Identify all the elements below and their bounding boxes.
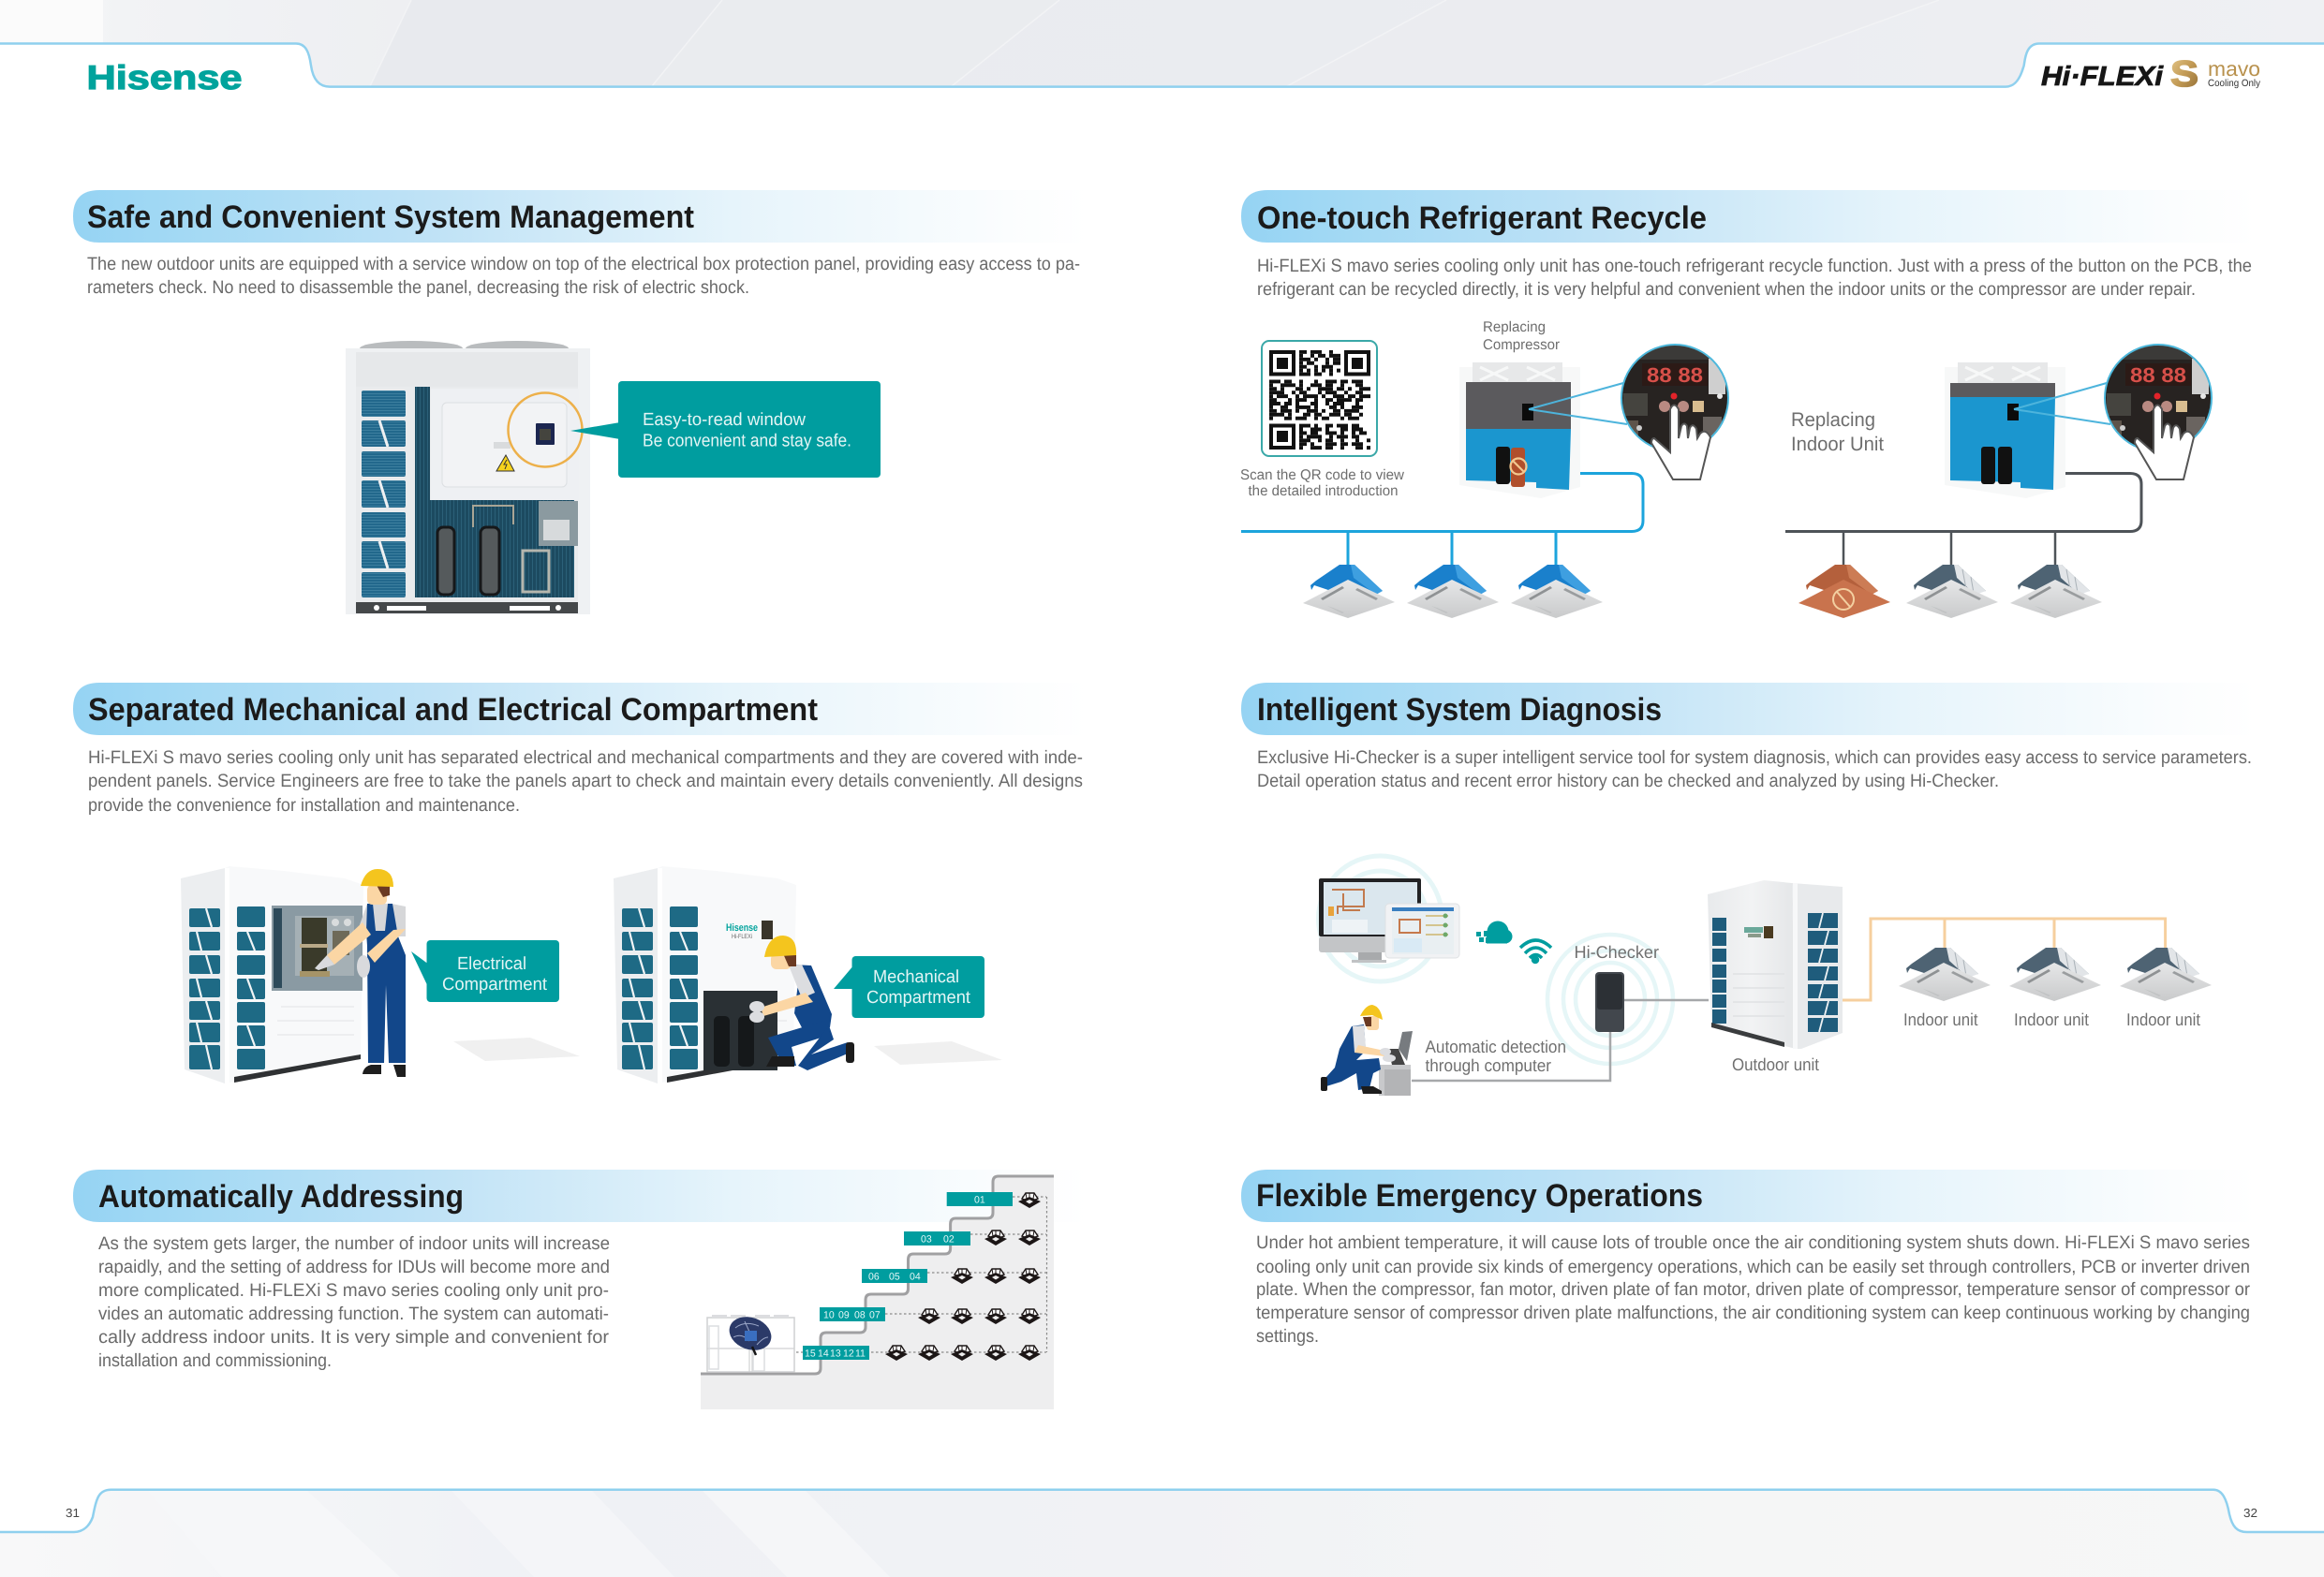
address box 06 05 04: 04 [910, 1272, 921, 1283]
address box 10 09 08 07: 08 [854, 1309, 866, 1320]
body text: provide the convenience for installation and maintenance. [88, 795, 520, 816]
body text: rameters check. No need to disassemble the panel, decreasing the risk of electric shock. [87, 277, 749, 298]
QR caption: the detailed introduction [1248, 483, 1398, 499]
body text: As the system gets larger, the number of indoor units will increase [98, 1233, 610, 1254]
worker at computer [1321, 1005, 1413, 1096]
label: automatic detection: through computer [1426, 1055, 1551, 1075]
address box 01 [947, 1192, 1013, 1206]
icon: wifi [1520, 940, 1551, 963]
panel: one-touch refrigerant recycle [1240, 190, 2257, 618]
body text: rapaidly, and the setting of address for IDUs will become more and [98, 1257, 610, 1277]
label: automatic detection [1426, 1037, 1566, 1075]
body text [1256, 1232, 2250, 1347]
body text: pendent panels. Service Engineers are free to take the panels apart to check and maintain every details conveniently. All designs [88, 771, 1083, 791]
body text: more complicated. Hi-FLEXi S mavo series cooling only unit pro- [98, 1280, 609, 1301]
heading bar: Automatically Addressing [98, 1179, 464, 1215]
pipe diagram: blue refrigerant line [1241, 474, 1643, 566]
body text: Detail operation status and recent error history can be checked and analyzed by using Hi-Checker. [1257, 771, 1999, 791]
body text [1257, 747, 2252, 791]
worker standing [315, 869, 406, 1077]
label: outdoor unit: Outdoor unit [1732, 1054, 1819, 1074]
callout: electrical compartment [411, 940, 559, 1002]
label: replacing indoor unit: Replacing [1791, 409, 1875, 431]
Hi-FLEXi S mavo logo: mavo [2208, 57, 2260, 81]
callout: mechanical compartment: Compartment [866, 988, 971, 1008]
address box 15 14 13 12 11: 14 [818, 1349, 829, 1360]
body text [98, 1233, 610, 1371]
indoor unit icons [885, 1193, 1041, 1361]
callout: mechanical compartment: Mechanical [873, 967, 959, 987]
heading bar [73, 683, 1088, 735]
address box 03 02 [904, 1231, 970, 1245]
body text: Hi-FLEXi S mavo series cooling only unit has separated electrical and mechanical compartments and they are covered with inde- [88, 747, 1083, 768]
icon: PCB magnifier with finger press [2105, 345, 2212, 479]
label: Hi-Checker: Hi-Checker [1574, 942, 1659, 962]
body text [1257, 256, 2252, 300]
floor shadow [453, 1038, 580, 1061]
callout lines to PCB [1529, 383, 1627, 424]
body text: cooling only unit can provide six kinds of emergency operations, which can be easily set through controllers, PCB or inverter driven [1256, 1257, 2250, 1277]
labels: indoor units: Indoor unit [2014, 1010, 2089, 1029]
outdoor unit: mechanical compartment open: Hisense [726, 922, 758, 934]
outdoor unit photo [346, 341, 590, 614]
address box 15 14 13 12 11: 12 [843, 1349, 854, 1360]
callout lines to PCB [2014, 383, 2110, 424]
outdoor unit: mechanical compartment open: Hi-FLEXi [732, 933, 752, 940]
icon: PCB magnifier with finger press: 88 88 [1647, 363, 1703, 387]
connection lines: orange [1843, 919, 2166, 1000]
unit: compressor replacement [1459, 362, 1580, 498]
callout: easy-to-read window: Be convenient and stay safe. [643, 431, 851, 451]
Hi-FLEXi S mavo logo: Hi·FLEXi [2041, 62, 2164, 92]
top header band [0, 0, 2324, 87]
body text [87, 254, 1080, 298]
QR caption: Scan the QR code to view [1240, 467, 1405, 483]
signal rings: Hi-Checker [1547, 935, 1673, 1064]
address box 15 14 13 12 11: 15 [805, 1349, 816, 1360]
icon: Hi-Checker device [1595, 972, 1624, 1032]
outdoor unit with brain [707, 1311, 794, 1372]
body text: vides an automatic addressing function. The system can automati- [98, 1304, 609, 1324]
panel: separated mechanical and electrical compartment [73, 683, 1088, 1083]
label: replacing indoor unit: Indoor Unit [1791, 434, 1884, 455]
body text: plate. When the compressor, fan motor, driven plate of fan motor, driven plate of compressor, temperature sensor of compressor or [1256, 1279, 2250, 1300]
panel: safe and convenient system management [73, 190, 1088, 614]
pipe diagram: gray line [1785, 474, 2141, 566]
address box 10 09 08 07: 10 [823, 1309, 835, 1320]
callout: easy-to-read window: Easy-to-read window [643, 410, 806, 430]
address box 10 09 08 07: 07 [869, 1309, 881, 1320]
heading bar: Flexible Emergency Operations [1256, 1178, 1703, 1214]
staircase diagram [701, 1176, 1054, 1409]
icon: cloud [1476, 921, 1512, 944]
panel: intelligent system diagnosis [1241, 683, 2257, 1096]
label: automatic detection: Automatic detection [1426, 1037, 1566, 1056]
labels: indoor units [1903, 1010, 2200, 1029]
indoor unit: faulty brown [1799, 565, 1890, 618]
heading bar [73, 190, 1088, 243]
label: replacing compressor: Compressor [1483, 337, 1560, 353]
body text: Under hot ambient temperature, it will cause lots of trouble once the air conditioning system shuts down. Hi-FLEXi S mavo series [1256, 1232, 2250, 1253]
QR caption [1240, 467, 1405, 499]
heading bar [1241, 1170, 2257, 1222]
body text: cally address indoor units. It is very simple and convenient for [98, 1327, 610, 1348]
address box 03 02: 03 [921, 1234, 932, 1245]
heading bar: Safe and Convenient System Management [87, 199, 694, 235]
outdoor unit: electrical compartment open [181, 866, 363, 1083]
unit: indoor unit replacement [1945, 362, 2065, 498]
callout: easy-to-read window [570, 381, 881, 478]
indoor units [1899, 948, 2212, 1001]
QR code [1262, 341, 1377, 456]
address box 10 09 08 07 [820, 1307, 885, 1321]
outdoor unit: mechanical compartment open [614, 866, 796, 1083]
connection lines: gray [1412, 1000, 1709, 1081]
address box 01: 01 [974, 1195, 985, 1206]
floor shadow [874, 1041, 1002, 1065]
address box 15 14 13 12 11 [803, 1346, 869, 1360]
labels: indoor units: Indoor unit [2126, 1010, 2200, 1029]
address box 10 09 08 07: 09 [838, 1309, 850, 1320]
outdoor unit [1708, 880, 1843, 1049]
address box 06 05 04: 05 [889, 1272, 900, 1283]
body text: Exclusive Hi-Checker is a super intelligent service tool for system diagnosis, which can provides easy access to service parameters. [1257, 747, 2252, 768]
body text: settings. [1256, 1326, 1319, 1347]
body text: installation and commissioning. [98, 1350, 332, 1371]
address box 03 02: 02 [943, 1234, 955, 1245]
heading bar [73, 1170, 1088, 1222]
label: replacing indoor unit [1791, 409, 1884, 455]
label: replacing compressor [1483, 319, 1560, 353]
icon: monitor and tablet [1319, 878, 1459, 963]
icon: PCB magnifier with finger press [1621, 345, 1728, 479]
bottom footer band [0, 1490, 2324, 1577]
heading bar: Intelligent System Diagnosis [1257, 692, 1662, 728]
heading bar: One-touch Refrigerant Recycle [1257, 200, 1707, 236]
body text [88, 747, 1083, 816]
address box 15 14 13 12 11: 11 [855, 1349, 866, 1360]
body text: refrigerant can be recycled directly, it is very helpful and convenient when the indoor units or the compressor are under repair. [1257, 279, 2196, 300]
Hi-FLEXi S mavo logo: S [2170, 54, 2198, 95]
heading bar: Separated Mechanical and Electrical Compartment [88, 692, 818, 728]
heading bar [1241, 190, 2257, 243]
icon: PCB magnifier with finger press: 88 88 [2130, 363, 2186, 387]
indoor units: gray [1906, 565, 2102, 618]
label: replacing compressor: Replacing [1483, 319, 1546, 335]
panel: flexible emergency operations [1241, 1170, 2257, 1347]
signal rings: monitor [1319, 856, 1443, 981]
Hisense logo: Hisense [86, 58, 242, 96]
orange highlight circle [508, 393, 583, 466]
body text: Hi-FLEXi S mavo series cooling only unit has one-touch refrigerant recycle function. Just with a press of the button on the PCB, the [1257, 256, 2252, 276]
callout: mechanical compartment [834, 956, 984, 1018]
Hi-FLEXi S mavo logo [2041, 54, 2261, 95]
panel: automatically addressing [73, 1170, 1088, 1409]
labels: indoor units: Indoor unit [1903, 1010, 1978, 1029]
page number 32: 32 [2243, 1506, 2257, 1520]
body text: temperature sensor of compressor driven plate malfunctions, the air conditioning system can keep continuous working by changing [1256, 1303, 2250, 1323]
address box 06 05 04 [862, 1269, 927, 1283]
address box 06 05 04: 06 [868, 1272, 880, 1283]
address box 15 14 13 12 11: 13 [830, 1349, 841, 1360]
callout: electrical compartment: Electrical [457, 954, 526, 974]
Hi-FLEXi S mavo logo: Cooling Only [2208, 78, 2261, 89]
callout: electrical compartment: Compartment [442, 975, 548, 995]
worker kneeling [749, 936, 854, 1070]
heading bar [1241, 683, 2257, 735]
body text: The new outdoor units are equipped with a service window on top of the electrical box protection panel, providing easy access to pa- [87, 254, 1080, 274]
page number 31: 31 [66, 1506, 80, 1520]
indoor units: blue [1303, 565, 1603, 618]
